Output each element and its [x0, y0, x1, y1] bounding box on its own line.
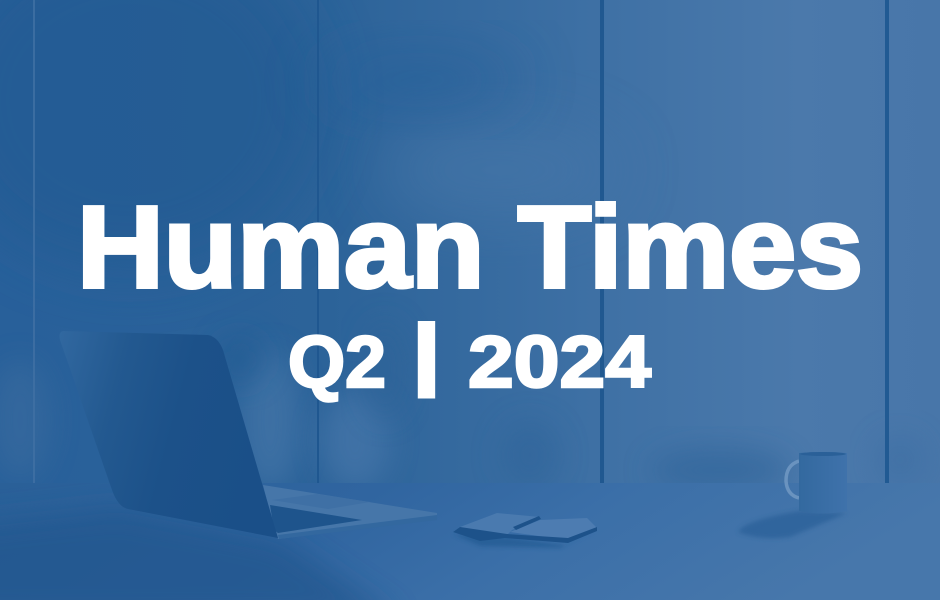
left page	[453, 513, 540, 535]
trackpad	[272, 494, 370, 509]
title: Human Times	[77, 182, 863, 312]
subtitle	[288, 313, 651, 403]
window frame mullions	[33, 0, 889, 483]
subtitle: Q2	[288, 322, 386, 403]
right page	[510, 518, 597, 540]
cover edge	[453, 527, 597, 543]
laptop lid	[59, 331, 278, 538]
mug body	[799, 452, 847, 514]
subtitle: 2024	[468, 322, 651, 403]
subtitle: |	[416, 313, 437, 394]
keyboard	[270, 505, 362, 533]
coffee mug	[738, 452, 847, 538]
pen	[513, 516, 541, 530]
mug handle	[786, 461, 799, 498]
desk surface	[0, 483, 940, 600]
laptop base	[263, 485, 437, 539]
notebook	[453, 513, 597, 548]
mug shadow	[738, 511, 847, 538]
laptop	[59, 331, 437, 539]
